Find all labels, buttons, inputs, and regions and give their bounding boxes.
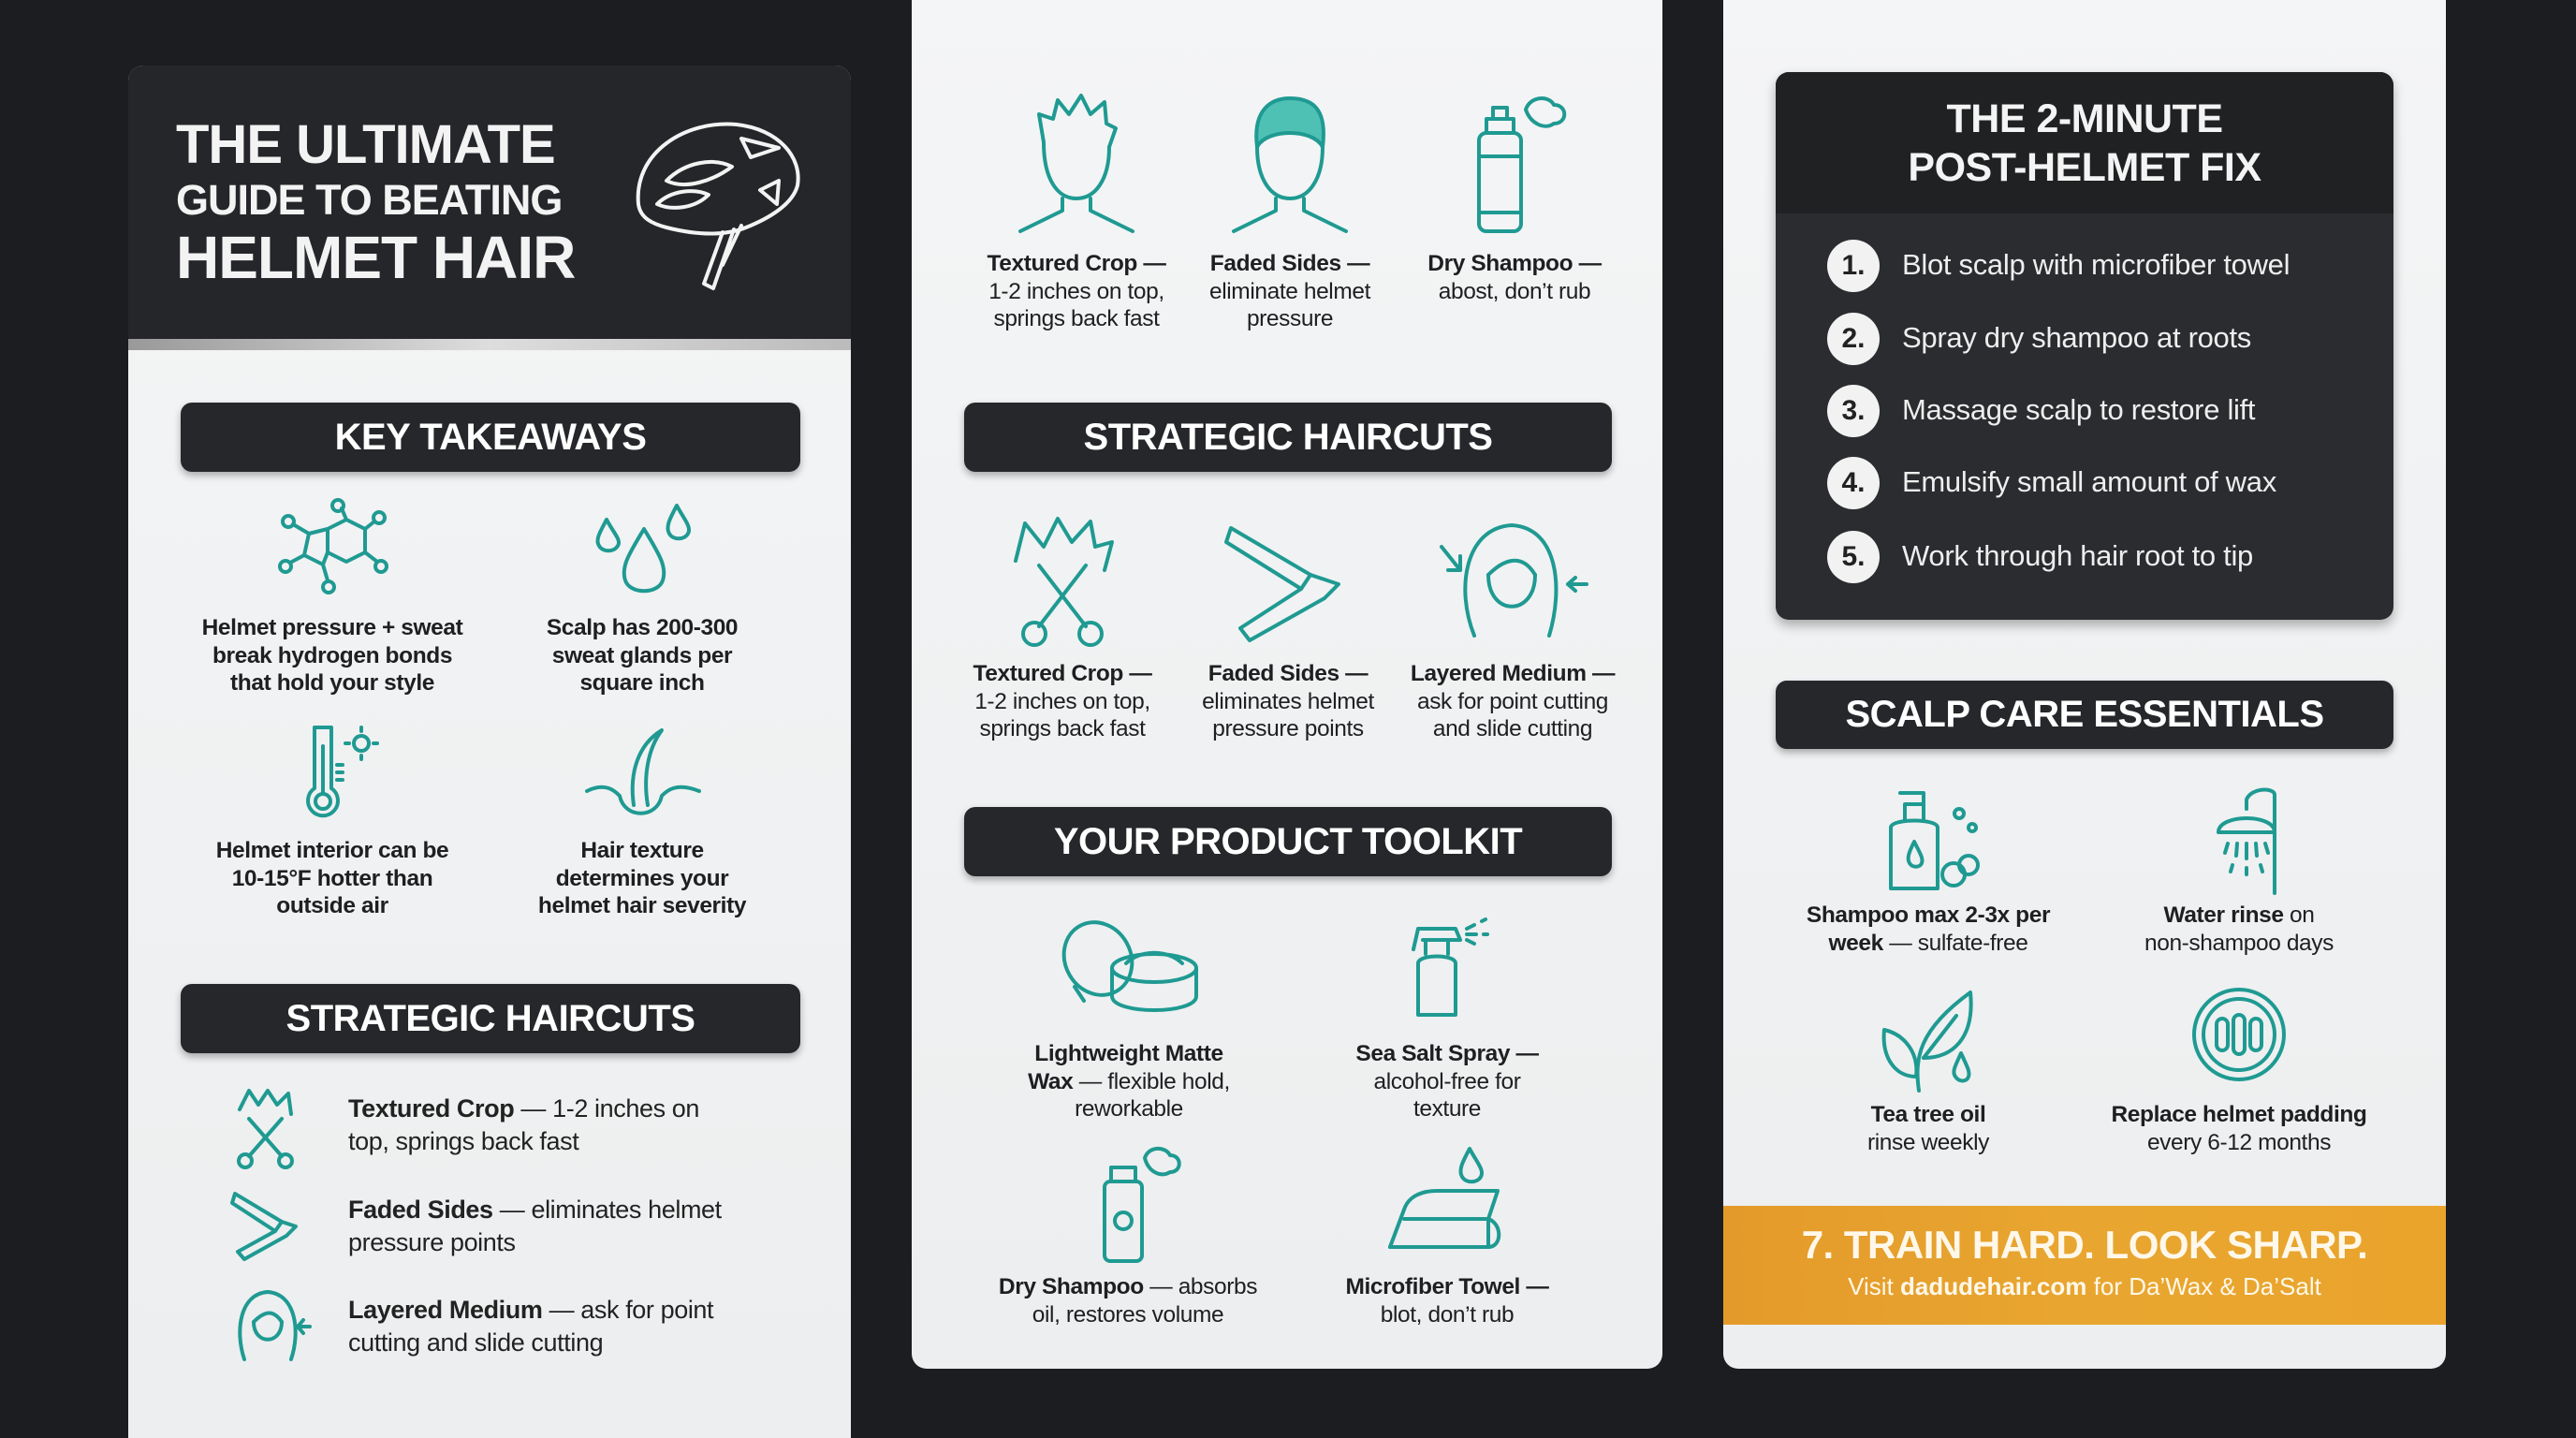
footer banner	[1723, 1206, 2446, 1325]
icon: faded sides face	[1232, 96, 1348, 234]
text: faded sides: Faded Sides — eliminates helmet	[348, 1196, 722, 1224]
steps: 1.	[1841, 250, 1866, 281]
text: replace padding: Replace helmet padding	[2111, 1102, 2366, 1127]
text: textured crop top: Textured Crop —	[988, 251, 1165, 276]
icon: shampoo bottle	[1889, 791, 1980, 890]
text: sea salt spray: alcohol-free for	[1373, 1069, 1520, 1093]
icon: helmet	[637, 122, 800, 290]
text: sweat glands	[547, 615, 738, 696]
heading: strategic haircuts left	[181, 984, 800, 1053]
text: Blot scalp with microfiber towel	[1902, 248, 2290, 281]
text: dry shampoo top: abost, don’t rub	[1439, 279, 1590, 303]
text: tea tree: rinse weekly	[1867, 1129, 1989, 1155]
text: layered medium	[348, 1296, 713, 1357]
text: textured crop mid	[973, 661, 1152, 741]
text: layered medium mid: and slide cutting	[1433, 716, 1592, 741]
text: textured crop: Textured Crop — 1-2 inches on	[348, 1094, 699, 1123]
text: textured crop: top, springs back fast	[348, 1127, 578, 1155]
text: faded sides	[348, 1196, 722, 1256]
icon: wax tin	[1061, 920, 1198, 1012]
heading: scalp care: SCALP CARE ESSENTIALS	[1845, 694, 2324, 735]
text: matte wax	[1028, 1041, 1230, 1122]
text: faded sides top: pressure	[1247, 306, 1333, 331]
text: helmet interior: 10-15°F hotter than	[232, 865, 432, 891]
icon: razor list	[230, 1192, 298, 1261]
text: 4.	[1841, 467, 1866, 498]
heading: scalp care	[1776, 681, 2393, 749]
steps	[1827, 240, 1880, 292]
icon: layered hair	[1440, 523, 1588, 638]
text: Massage scalp to restore lift	[1902, 393, 2255, 426]
text: 3.	[1841, 395, 1866, 426]
icon: spray bottle	[1412, 917, 1489, 1017]
heading: strategic haircuts middle	[964, 403, 1612, 472]
text: Emulsify small amount of wax	[1902, 465, 2276, 498]
text: microfiber towel: Microfiber Towel —	[1346, 1274, 1548, 1299]
icon: towel	[1388, 1146, 1501, 1249]
icon: scissors	[1013, 517, 1114, 647]
title: THE ULTIMATE	[176, 114, 555, 175]
text: faded sides top	[1209, 251, 1370, 331]
text: textured crop mid: Textured Crop —	[973, 661, 1151, 686]
text: shampoo: Shampoo max 2-3x per	[1807, 902, 2050, 928]
heading: product toolkit: YOUR PRODUCT TOOLKIT	[1054, 821, 1522, 862]
icon: shower	[2217, 788, 2276, 895]
text: faded sides top: Faded Sides —	[1210, 251, 1369, 276]
text: Work through hair root to tip	[1902, 539, 2253, 572]
text: tea tree	[1788, 1101, 2069, 1156]
text: layered medium: Layered Medium — ask for point	[348, 1296, 713, 1324]
header block	[128, 66, 851, 339]
icon: helmet padding	[2190, 983, 2289, 1095]
text: hair texture: determines your	[556, 865, 728, 891]
icon: scissors list	[237, 1088, 294, 1169]
text: sea salt spray: Sea Salt Spray —	[1355, 1041, 1539, 1066]
icon: dry shampoo can top	[1477, 96, 1567, 233]
text: helmet interior: outside air	[276, 893, 388, 918]
text: dry shampoo: Dry Shampoo — absorbs	[999, 1274, 1257, 1299]
icon: sweat drops	[595, 504, 691, 594]
text: sweat glands: sweat glands per	[552, 642, 732, 668]
text: water rinse	[2144, 902, 2334, 955]
panel: post-helmet fix	[1776, 72, 2393, 620]
text: layered medium: cutting and slide cutting	[348, 1328, 603, 1357]
text: shampoo	[1807, 902, 2050, 955]
callout: footer: Visit dadudehair.com for Da’Wax & Da’Salt	[1848, 1272, 2321, 1300]
text: faded sides mid: pressure points	[1212, 716, 1364, 741]
text: sea salt spray	[1355, 1041, 1539, 1122]
heading: strategic haircuts left: STRATEGIC HAIRCUTS	[286, 998, 695, 1039]
text: faded sides mid: eliminates helmet	[1202, 689, 1374, 713]
icon: dry shampoo	[1103, 1146, 1181, 1263]
text: dry shampoo: oil, restores volume	[1032, 1301, 1223, 1328]
text: hydrogen bonds: break hydrogen bonds	[212, 642, 452, 668]
text: hair texture: helmet hair severity	[538, 893, 746, 918]
text: sweat glands: square inch	[579, 670, 705, 696]
callout: footer	[1723, 1221, 2446, 1303]
text: faded sides mid: Faded Sides —	[1208, 661, 1368, 686]
text: dry shampoo top: Dry Shampoo —	[1427, 251, 1602, 276]
icon: thermometer	[306, 726, 379, 818]
icon: textured crop face	[1018, 94, 1134, 234]
heading: post-helmet fix: POST-HELMET FIX	[1908, 145, 2261, 190]
text: tea tree: Tea tree oil	[1871, 1102, 1985, 1127]
heading: key takeaways: KEY TAKEAWAYS	[335, 417, 646, 458]
text: textured crop	[348, 1094, 699, 1155]
text: hair texture	[538, 838, 747, 918]
text: textured crop top	[987, 251, 1166, 331]
text: helmet interior	[216, 838, 448, 918]
text: matte wax: Wax — flexible hold,	[1028, 1069, 1230, 1093]
text: microfiber towel	[1346, 1274, 1549, 1328]
title: HELMET HAIR	[176, 224, 575, 291]
text: matte wax: Lightweight Matte	[1034, 1041, 1223, 1066]
icon: layered hair list	[238, 1290, 312, 1361]
heading: product toolkit	[964, 807, 1612, 876]
text: sweat glands: Scalp has 200-300	[547, 615, 738, 640]
text: matte wax: reworkable	[1075, 1096, 1183, 1122]
text: water rinse: non-shampoo days	[2144, 931, 2334, 955]
icon: razor	[1224, 526, 1340, 642]
panel: left	[128, 66, 851, 1438]
text: layered medium mid: Layered Medium —	[1411, 661, 1615, 686]
text: helmet interior: Helmet interior can be	[216, 838, 448, 863]
text: textured crop mid: springs back fast	[979, 716, 1146, 741]
text: hydrogen bonds	[202, 615, 462, 696]
icon: tea tree leaf	[1877, 983, 1980, 1095]
text: faded sides mid	[1202, 661, 1374, 741]
text: replace padding: every 6-12 months	[2147, 1129, 2331, 1155]
text: sea salt spray: texture	[1413, 1096, 1481, 1122]
icon: hair follicle	[584, 728, 702, 815]
heading: key takeaways	[181, 403, 800, 472]
text: layered medium mid: ask for point cutting	[1417, 689, 1608, 713]
heading: strategic haircuts middle: STRATEGIC HAIRCUTS	[1084, 417, 1492, 458]
text: layered medium mid	[1411, 661, 1616, 741]
text: microfiber towel: blot, don’t rub	[1381, 1301, 1514, 1328]
panel: right	[1723, 0, 2446, 1369]
text: textured crop top: 1-2 inches on top,	[988, 279, 1164, 303]
text: textured crop mid: 1-2 inches on top,	[974, 689, 1150, 713]
text: faded sides top: eliminate helmet	[1209, 279, 1370, 303]
text: faded sides: pressure points	[348, 1228, 516, 1256]
text: Spray dry shampoo at roots	[1902, 321, 2251, 354]
text: replace padding	[2078, 1101, 2400, 1156]
text: water rinse: Water rinse on	[2164, 902, 2314, 928]
text: dry shampoo	[999, 1274, 1257, 1328]
text: dry shampoo top	[1427, 251, 1603, 303]
text: hydrogen bonds: Helmet pressure + sweat	[202, 615, 462, 640]
text: hydrogen bonds: that hold your style	[230, 670, 434, 696]
heading: post-helmet fix: THE 2-MINUTE	[1947, 96, 2222, 141]
panel: middle	[912, 0, 1662, 1369]
title	[176, 114, 575, 291]
text: textured crop top: springs back fast	[993, 306, 1160, 331]
icon: molecule	[278, 498, 388, 594]
callout: footer: 7. TRAIN HARD. LOOK SHARP.	[1802, 1223, 2367, 1267]
text: 2.	[1841, 323, 1866, 354]
title: GUIDE TO BEATING	[176, 176, 562, 224]
heading: post-helmet fix	[1776, 72, 2393, 213]
text: hair texture: Hair texture	[580, 838, 704, 863]
text: 5.	[1841, 541, 1866, 572]
text: shampoo: week — sulfate-free	[1828, 931, 2028, 955]
